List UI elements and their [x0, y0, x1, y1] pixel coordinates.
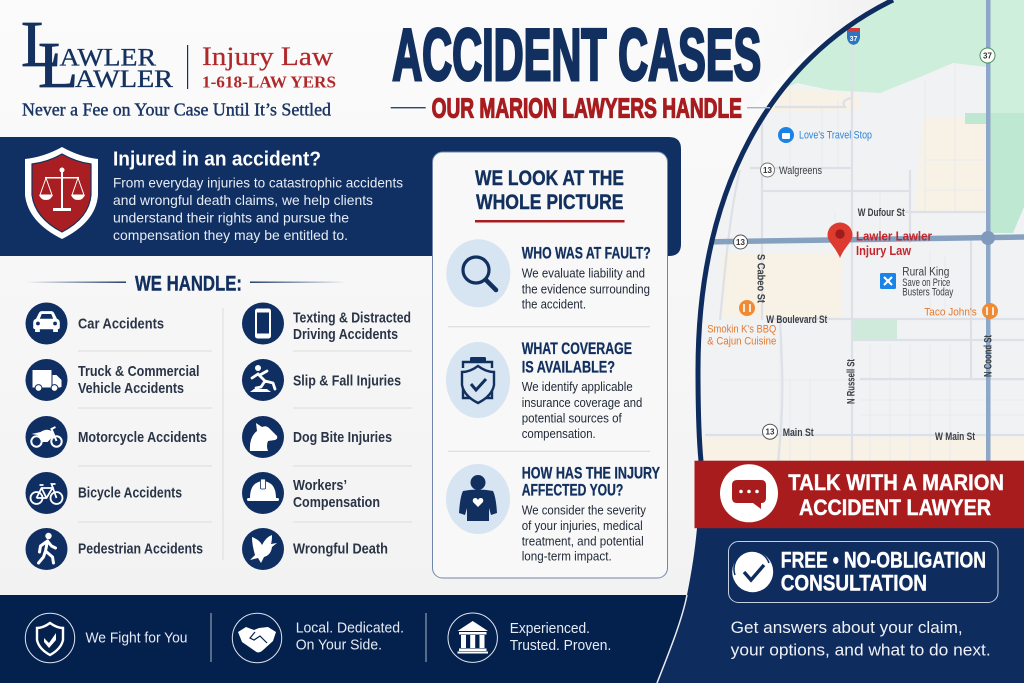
item: wrongful death: Wrongful Death	[293, 541, 388, 558]
map label: Rural King	[880, 266, 954, 298]
panel: footer strip	[0, 595, 700, 683]
card heading	[475, 166, 624, 222]
item: what coverage is available: insurance coverage and	[522, 395, 642, 410]
item: texting and distracted driving accidents: Driving Accidents	[293, 326, 398, 343]
consultation description	[731, 618, 991, 660]
item: truck and commercial vehicle accidents: Truck & Commercial	[78, 363, 200, 380]
map label: Taco John's	[924, 303, 998, 319]
item: motorcycle accidents: Motorcycle Accidents	[78, 429, 207, 446]
logo: AWLER	[75, 66, 173, 93]
map label: Rural King: Save on Price	[902, 277, 950, 289]
heading: we handle: WE HANDLE:	[135, 272, 242, 296]
item: how has the injury affected you: HOW HAS THE INJURY	[522, 464, 660, 482]
logo: Injury Law and phone: Injury Law	[202, 42, 333, 71]
item: workers compensation: Workers’	[293, 477, 347, 494]
item: workers compensation	[242, 472, 380, 514]
free no-obligation consultation box	[728, 542, 998, 602]
map label: Rural King: Rural King	[902, 266, 949, 278]
item: what coverage is available: We identify applicable	[522, 379, 633, 394]
map label: Love's Travel Stop	[778, 127, 872, 143]
item: texting and distracted driving accidents	[242, 302, 411, 344]
item: what coverage is available	[446, 340, 642, 441]
item: how has the injury affected you	[446, 464, 660, 564]
item: how has the injury affected you: of your injuries, medical	[522, 518, 643, 533]
item: truck and commercial vehicle accidents	[26, 359, 200, 401]
item: slip and fall injuries: Slip & Fall Injuries	[293, 373, 401, 390]
logo: AWLER	[60, 45, 156, 72]
card heading: WHOLE PICTURE	[476, 190, 624, 214]
item: who was at fault: the accident.	[522, 296, 586, 311]
map label: Smokin K's BBQ: & Cajun Cuisine	[707, 336, 776, 348]
map label: highway 37: 37	[983, 52, 992, 60]
item: how has the injury affected you: treatment, and potential	[522, 533, 644, 548]
item: who was at fault: We evaluate liability and	[522, 266, 645, 281]
badge: local dedicated: Local. Dedicated.	[296, 620, 404, 637]
banner body text: compensation they may be entitled to.	[113, 227, 348, 243]
map pin and firm label: Lawler Lawler	[856, 230, 932, 244]
logo: L	[38, 29, 78, 102]
banner body text	[113, 174, 403, 243]
badge: local dedicated: On Your Side.	[296, 636, 382, 654]
consultation description: your options, and what to do next.	[731, 641, 991, 660]
item: how has the injury affected you: AFFECTED YOU?	[522, 482, 623, 500]
map label: Taco John's: Taco John's	[924, 306, 977, 318]
badge: experienced trusted proven: Trusted. Proven.	[510, 637, 611, 654]
item: how has the injury affected you: long-term impact.	[522, 549, 612, 564]
map pin and firm label	[828, 222, 932, 258]
map label: highway 13: 13	[736, 238, 745, 247]
item: bicycle accidents	[26, 472, 182, 514]
logo: Injury Law and phone	[202, 42, 336, 91]
item: workers compensation: Compensation	[293, 494, 380, 511]
map label: W Dufour St: W Dufour St	[858, 207, 905, 219]
title: ACCIDENT CASES	[392, 15, 761, 96]
map label: Main St: Main St	[783, 427, 814, 439]
map label: Walgreens	[760, 163, 822, 177]
logo: Injury Law and phone: 1-618-LAW YERS	[202, 72, 336, 91]
item: dog bite injuries: Dog Bite Injuries	[293, 429, 392, 446]
tagline: Never a Fee on Your Case Until It’s Settled	[22, 100, 331, 120]
map label: interstate 37 shield: 37	[850, 36, 857, 43]
red banner: talk with a marion accident lawyer: ACCIDENT LAWYER	[799, 495, 991, 520]
map label: Love's Travel Stop: Love's Travel Stop	[799, 130, 872, 142]
map label: Smokin K's BBQ: Smokin K's BBQ	[707, 324, 777, 336]
free no-obligation consultation box: CONSULTATION	[781, 571, 927, 596]
map label: Walgreens: Walgreens	[779, 165, 822, 177]
panel: we look at the whole picture	[432, 152, 668, 578]
map pin and firm label: Injury Law	[856, 244, 911, 258]
item: texting and distracted driving accidents: Texting & Distracted	[293, 309, 411, 326]
panel: injured in an accident banner	[0, 137, 681, 256]
item: dog bite injuries	[242, 416, 392, 458]
item: pedestrian accidents: Pedestrian Accidents	[78, 541, 203, 558]
panel: consultation call to action	[657, 461, 1024, 683]
item: car accidents	[26, 302, 164, 344]
card heading: WE LOOK AT THE	[475, 166, 624, 190]
item: car accidents: Car Accidents	[78, 316, 164, 332]
badge: we fight for you	[25, 613, 187, 663]
badge: local dedicated	[232, 613, 404, 663]
map label: S Cabeo St: S Cabeo St	[754, 254, 766, 303]
item: pedestrian accidents	[26, 528, 203, 570]
item: who was at fault: WHO WAS AT FAULT?	[522, 244, 651, 262]
icon: shield with scales	[25, 147, 98, 239]
map label: Main St	[762, 424, 814, 439]
logo	[21, 8, 188, 102]
panel: we handle	[26, 272, 412, 570]
badge: experienced trusted proven: Experienced.	[510, 620, 590, 637]
banner heading: Injured in an accident?	[113, 149, 321, 171]
banner body text: and wrongful death claims, we help clients	[113, 192, 373, 208]
item: who was at fault	[446, 239, 651, 311]
map label: N Russell St: N Russell St	[846, 359, 858, 404]
subtitle: OUR MARION LAWYERS HANDLE	[432, 93, 742, 124]
map label: W Main St: W Main St	[935, 431, 975, 443]
item: how has the injury affected you: We consider the severity	[522, 502, 646, 517]
badge: experienced trusted proven	[448, 613, 611, 662]
map label: Smokin K's BBQ	[707, 300, 777, 348]
badge: we fight for you: We Fight for You	[86, 630, 188, 647]
item: who was at fault: the evidence surrounding	[522, 281, 650, 296]
map label: Main St: 13	[766, 428, 775, 437]
item: bicycle accidents: Bicycle Accidents	[78, 485, 182, 502]
logo: L	[21, 8, 61, 81]
item: what coverage is available: potential sources of	[522, 410, 622, 425]
map label: interstate 37 shield	[847, 28, 860, 45]
map panel	[690, 0, 1024, 461]
map label: W Boulevard St: W Boulevard St	[766, 314, 828, 326]
item: wrongful death	[242, 528, 388, 570]
map label: highway 13	[734, 235, 748, 249]
item: slip and fall injuries	[242, 359, 401, 401]
consultation description: Get answers about your claim,	[731, 618, 963, 637]
map label: Walgreens: 13	[763, 166, 772, 175]
red banner: talk with a marion accident lawyer	[694, 461, 1024, 528]
item: what coverage is available: WHAT COVERAGE	[522, 340, 632, 358]
item: what coverage is available: IS AVAILABLE?	[522, 358, 615, 376]
banner body text: understand their rights and pursue the	[113, 210, 349, 226]
navy arc border of map	[698, 0, 893, 461]
item: what coverage is available: compensation.	[522, 426, 596, 441]
map label: Rural King: Busters Today	[902, 286, 954, 298]
map label: highway 37	[980, 48, 995, 63]
item: motorcycle accidents	[26, 416, 207, 458]
item: truck and commercial vehicle accidents: Vehicle Accidents	[78, 380, 184, 397]
red banner: talk with a marion accident lawyer: TALK WITH A MARION	[788, 470, 1004, 495]
banner body text: From everyday injuries to catastrophic accidents	[113, 174, 403, 190]
map label: N Coond St: N Coond St	[982, 335, 994, 377]
